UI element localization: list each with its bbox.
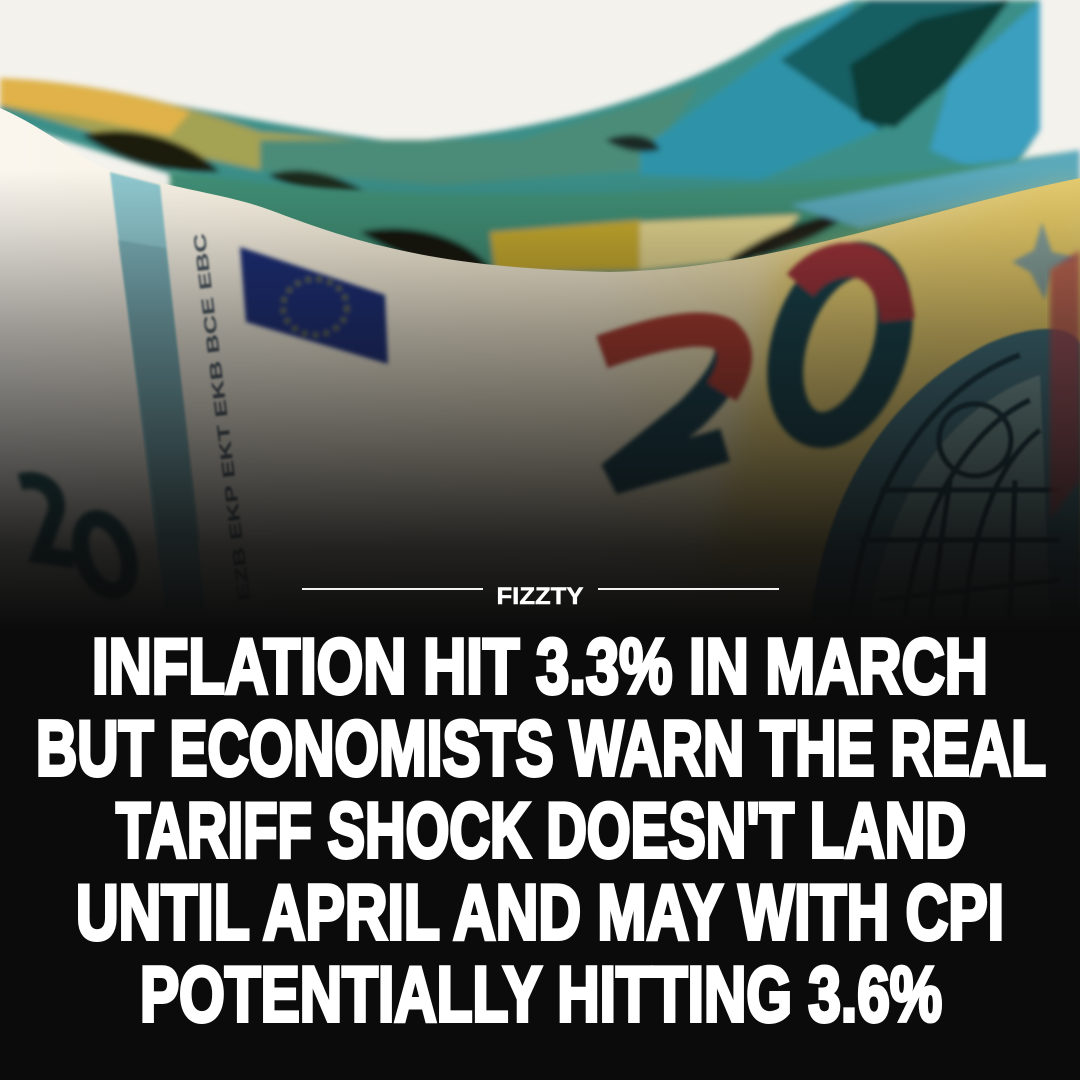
star on note — [1012, 222, 1078, 300]
red pattern at right edge — [1050, 250, 1080, 520]
headline — [36, 622, 1046, 1038]
back banknote: teal and gold — [0, 0, 1040, 215]
brand divider: FIZZTY: FIZZTY — [496, 583, 584, 610]
serial text band: EZB EKP EKT EKB BCE EBC — [190, 232, 254, 602]
banknote warm shade right — [700, 185, 1080, 600]
background photo: euro banknotes — [0, 0, 1080, 720]
EU flag — [240, 247, 388, 364]
cathedral window artwork — [810, 329, 1080, 640]
small 20 on left — [20, 481, 139, 598]
hologram stripe — [110, 172, 205, 610]
front banknote body — [0, 108, 1080, 720]
middle banknote band — [170, 150, 1080, 275]
dark gradient overlay — [0, 170, 1080, 630]
big red and blue 20 — [602, 246, 915, 478]
